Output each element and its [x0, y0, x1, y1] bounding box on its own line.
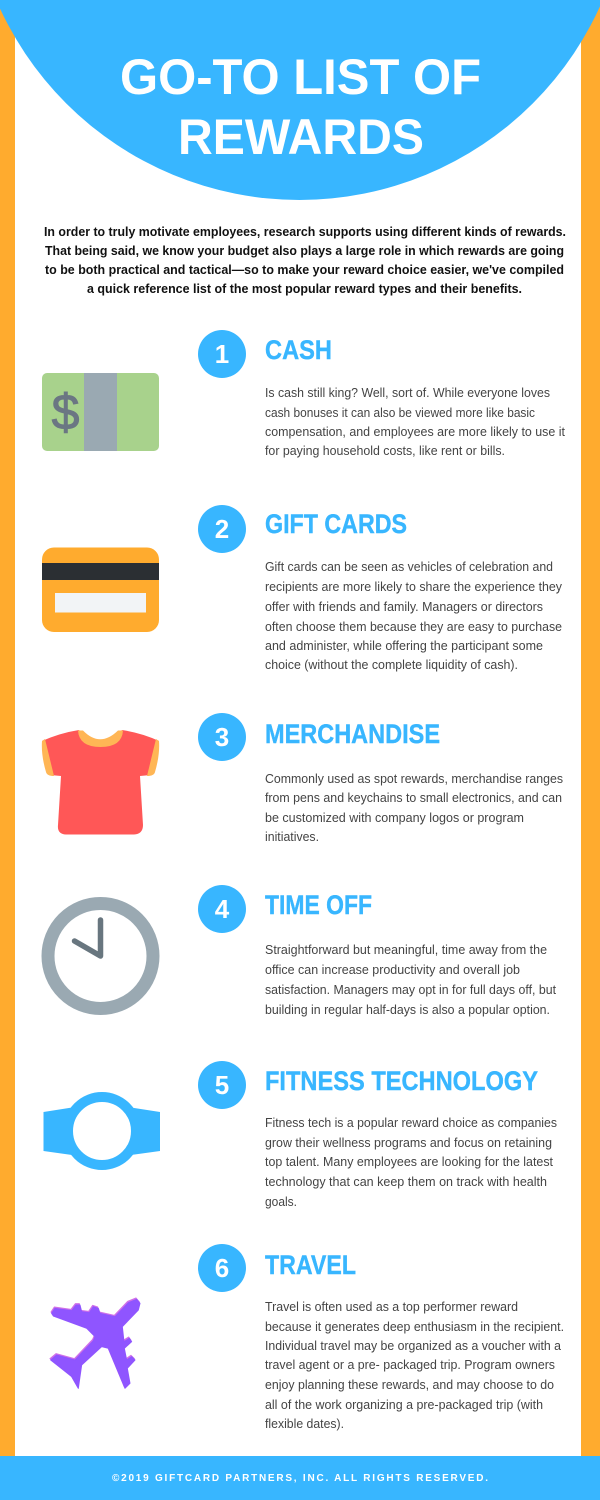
footer band [0, 1456, 600, 1500]
number badge 4: 4 [215, 894, 230, 924]
heading: travel: TRAVEL [265, 1250, 356, 1280]
intro text [44, 224, 566, 296]
icon: t-shirt [42, 730, 159, 834]
panel: time off [48, 885, 556, 1017]
number badge 1: 1 [215, 339, 229, 369]
travel description: because it generates deep enthusiasm in the recipient. [265, 1320, 564, 1334]
intro text: a quick reference list of the most popular reward types and their benefits. [87, 281, 522, 296]
travel description: enjoy planning these rewards, and may choose to do [265, 1378, 554, 1392]
icon: cash banknote: $ [52, 384, 79, 440]
travel description [265, 1300, 564, 1431]
icon: credit card [42, 548, 159, 632]
header blue circle [0, 0, 600, 200]
number badge 3: 3 [215, 722, 229, 752]
merchandise description: be customized with company logos or program [265, 811, 524, 825]
travel description: flexible dates). [265, 1417, 344, 1431]
travel description: all of the work organizing a pre-packaged trip (with [265, 1398, 543, 1412]
intro text: to be both practical and tactical—so to make your reward choice easier, we've compiled [45, 262, 564, 277]
number badge 2: 2 [215, 514, 229, 544]
gift cards description: choice (without the complete liquidity of cash). [265, 658, 518, 672]
gift cards description: and administer, while offering the participant some [265, 639, 543, 653]
number badge 4 [198, 885, 246, 933]
title: REWARDS [178, 109, 424, 165]
cash description [265, 386, 565, 458]
merchandise description [265, 772, 563, 844]
fitness technology description: grow their wellness programs and focus on retaining [265, 1136, 552, 1150]
gift cards description: Gift cards can be seen as vehicles of celebration and [265, 560, 553, 574]
panel: merchandise [42, 713, 563, 844]
number badge 6: 6 [215, 1253, 229, 1283]
cash description: cash bonuses it can also be viewed more like basic [265, 406, 535, 420]
intro text: In order to truly motivate employees, research supports using different kinds of rewards. [44, 224, 566, 239]
travel description: travel agent or a pre- packaged trip. Program owners [265, 1358, 555, 1372]
icon: fitness watch [44, 1097, 160, 1165]
travel description: Individual travel may be organized as a voucher with a [265, 1339, 561, 1353]
number badge 3 [198, 713, 246, 761]
title: GO-TO LIST OF [120, 49, 481, 105]
intro text: That being said, we know your budget also plays a large role in which rewards are going [45, 243, 564, 258]
travel description: Travel is often used as a top performer reward [265, 1300, 518, 1314]
merchandise description: Commonly used as spot rewards, merchandise ranges [265, 772, 563, 786]
number badge 5: 5 [215, 1070, 229, 1100]
time off description: office can increase productivity and overall job [265, 963, 520, 977]
heading: gift cards: GIFT CARDS [265, 509, 407, 539]
time off description [265, 943, 556, 1017]
merchandise description: from pens and keychains to small electronics, and can [265, 791, 562, 805]
footer copyright: ©2019 GIFTCARD PARTNERS, INC. ALL RIGHTS RESERVED. [112, 1473, 488, 1484]
gift cards description: often choose them because they are easy to purchase [265, 620, 562, 634]
number badge 5 [198, 1061, 246, 1109]
fitness technology description: Fitness tech is a popular reward choice as companies [265, 1116, 557, 1130]
heading: time off: TIME OFF [265, 890, 372, 920]
icon: cash banknote [42, 373, 159, 451]
icon: clock [48, 904, 153, 1008]
right orange side bar [581, 0, 600, 1460]
left orange side bar [0, 0, 15, 1460]
time off description: satisfaction. Managers may opt in for full days off, but [265, 983, 556, 997]
gift cards description: offer with friends and family. Managers or directors [265, 600, 543, 614]
gift cards description: recipients are more likely to share the experience they [265, 580, 563, 594]
cash description: compensation, and employees are more likely to use it [265, 425, 565, 439]
panel: cash [42, 330, 565, 458]
panel: travel [50, 1244, 564, 1431]
cash description: for paying household costs, like rent or bills. [265, 444, 505, 458]
heading: merchandise: MERCHANDISE [265, 719, 440, 749]
time off description: building in regular half-days is also a popular option. [265, 1003, 550, 1017]
heading: fitness technology: FITNESS TECHNOLOGY [265, 1066, 538, 1096]
number badge 1 [198, 330, 246, 378]
fitness technology description: top talent. Many employees are looking for the latest [265, 1155, 553, 1169]
number badge 2 [198, 505, 246, 553]
time off description: Straightforward but meaningful, time away from the [265, 943, 547, 957]
fitness technology description [265, 1116, 557, 1209]
gift cards description [265, 560, 563, 672]
fitness technology description: technology that can keep them on track with health [265, 1175, 547, 1189]
icon: airplane [50, 1298, 140, 1388]
number badge 6 [198, 1244, 246, 1292]
cash description: Is cash still king? Well, sort of. While everyone loves [265, 386, 550, 400]
title [120, 49, 481, 165]
fitness technology description: goals. [265, 1195, 297, 1209]
merchandise description: initiatives. [265, 830, 319, 844]
heading: cash: CASH [265, 335, 332, 365]
panel: fitness technology [44, 1061, 557, 1209]
panel: gift cards [42, 505, 563, 672]
